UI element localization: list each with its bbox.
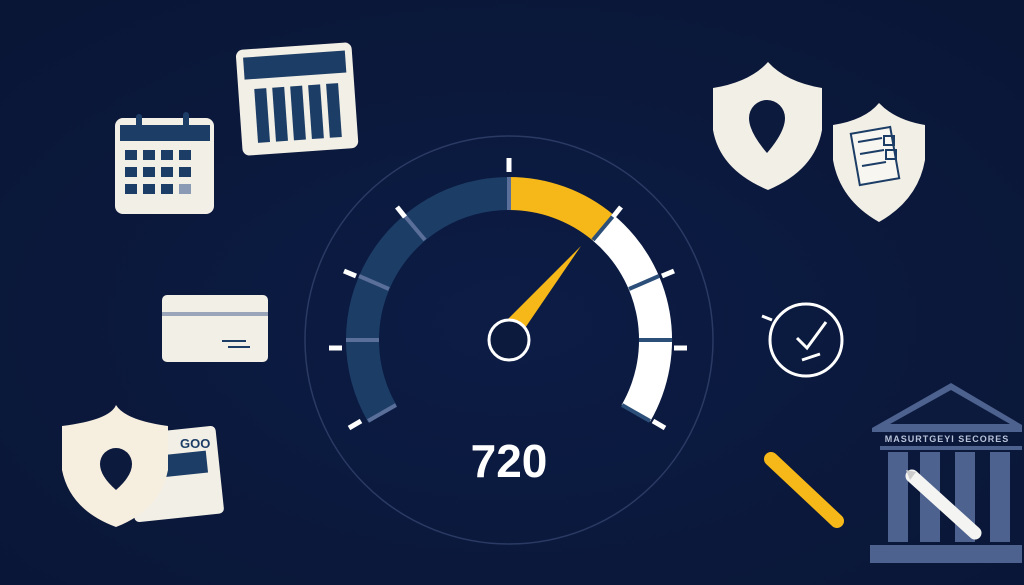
gauge [305, 136, 713, 544]
icon: credit card [162, 295, 268, 362]
icon: yellow pencil bar [771, 459, 837, 521]
icon: bank building: MASURTGEYI SECORES [885, 434, 1009, 444]
score: 720 [471, 435, 547, 487]
icon: shield with card: GOO [180, 436, 210, 451]
icon: shield with card [62, 405, 224, 527]
icon: shield with checklist [833, 103, 925, 222]
icon: clock [762, 304, 842, 376]
icon: bank building [870, 383, 1022, 563]
gauge band: yellow [509, 177, 614, 240]
gauge band: white [593, 215, 672, 422]
gauge band: dark blue [346, 177, 509, 422]
icon: calendar [115, 112, 214, 214]
needle [500, 246, 581, 331]
icon: shield top right [713, 62, 822, 190]
icon: bar table card [236, 42, 359, 156]
gauge ticks [329, 158, 687, 428]
